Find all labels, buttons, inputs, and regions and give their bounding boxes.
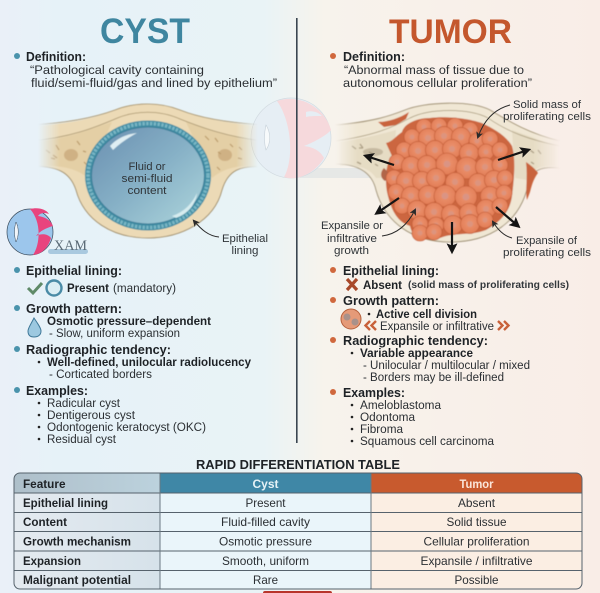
table header: Feature: [23, 477, 66, 491]
cyst: radiographic tendency: - Corticated borders: [49, 367, 152, 381]
cyst: epithelial lining: [14, 263, 176, 296]
cyst definition: “Pathological cavity containing: [30, 63, 204, 77]
icon: check mark: [28, 283, 42, 293]
cyst: epithelial lining: (mandatory): [113, 281, 176, 295]
row: expansion: Smooth, uniform: [222, 554, 309, 568]
cyst: epithelial lining: Epithelial lining:: [26, 263, 122, 278]
differentiation table: [14, 473, 582, 589]
cyst: growth pattern: - Slow, uniform expansion: [49, 326, 180, 340]
icon: ring: [46, 280, 62, 296]
tumor: growth pattern: Growth pattern:: [343, 293, 439, 308]
tumor definition: autonomous cellular proliferation”: [343, 76, 532, 90]
row: growth mechanism: Growth mechanism: [23, 534, 131, 548]
row: content: [23, 515, 507, 529]
tumor: radiographic tendency: Variable appearance: [360, 346, 473, 360]
label: epithelial lining: Epithelial: [222, 233, 268, 245]
icon: cross: [347, 279, 357, 290]
tumor: epithelial lining: Epithelial lining:: [343, 263, 439, 278]
cyst: examples: Examples:: [26, 383, 88, 398]
icon: right chevrons: [498, 321, 508, 330]
cyst definition: Definition:: [26, 49, 86, 64]
row: malignant potential: [23, 573, 499, 587]
icon: left chevrons: [366, 321, 376, 330]
tumor: epithelial lining: (solid mass of proliferating cells): [408, 280, 569, 291]
tumor: growth pattern: Expansile or infiltrative: [380, 319, 494, 333]
tumor: examples: Squamous cell carcinoma: [360, 434, 494, 448]
tumor: radiographic tendency: - Unilocular / multilocular / mixed: [363, 358, 530, 372]
cyst: radiographic tendency: Well-defined, unilocular radiolucency: [47, 355, 251, 369]
illustration: tumor in bone: [321, 99, 591, 259]
arrow: expansile or infiltrative: [382, 210, 415, 236]
cyst: radiographic tendency: [14, 342, 251, 381]
row: epithelial lining: Present: [246, 496, 286, 510]
row: content: Content: [23, 515, 67, 529]
cropped red badge at bottom edge: [263, 591, 332, 593]
label: expansile or infiltrative: growth: [334, 245, 369, 257]
tumor: growth pattern: Active cell division: [376, 307, 477, 321]
label: expansile of cells: [503, 235, 591, 259]
cyst: examples: Radicular cyst: [47, 396, 121, 410]
label: solid mass: Solid mass of: [513, 99, 582, 111]
row: epithelial lining: [23, 496, 496, 510]
table header: Cyst: [252, 477, 278, 491]
title: TUMOR: TUMOR: [389, 13, 512, 51]
icon: dividing cell: [341, 309, 361, 329]
illustration: cyst in bone: [30, 104, 268, 257]
tumor: epithelial lining: Absent: [363, 278, 402, 292]
label: fluid: [122, 161, 172, 197]
label: solid mass: [503, 99, 591, 123]
row: growth mechanism: Cellular proliferation: [424, 534, 530, 548]
icon: water drop: [28, 318, 41, 337]
row: epithelial lining: Absent: [458, 496, 496, 510]
label: expansile or infiltrative: Expansile or: [321, 220, 383, 232]
cyst: growth pattern: Growth pattern:: [26, 301, 122, 316]
central divider: [296, 18, 298, 443]
tumor: radiographic tendency: Radiographic tendency:: [343, 333, 488, 348]
arrow: epithelial lining: [194, 221, 219, 237]
arrow: solid mass: [478, 105, 510, 137]
label: expansile or infiltrative: [321, 220, 383, 257]
row: epithelial lining: Epithelial lining: [23, 496, 108, 510]
watermark: faint centre logo: [251, 98, 372, 178]
row: malignant potential: Possible: [454, 573, 499, 587]
tumor definition: [330, 49, 532, 90]
label: expansile or infiltrative: infiltrative: [327, 233, 377, 245]
tumor: examples: Fibroma: [360, 422, 403, 436]
table header: Tumor: [460, 477, 494, 491]
label: fluid: content: [128, 185, 167, 197]
tumor: radiographic tendency: - Borders may be ill-defined: [363, 370, 504, 384]
tumor: examples: Odontoma: [360, 410, 415, 424]
row: expansion: Expansile / infiltrative: [420, 554, 533, 568]
label: fluid: Fluid or: [128, 161, 166, 173]
cyst: epithelial lining: Present: [67, 281, 109, 295]
cyst: growth pattern: [14, 301, 211, 340]
row: growth mechanism: Osmotic pressure: [219, 534, 312, 548]
cyst: examples: [14, 383, 206, 446]
label: epithelial lining: [222, 233, 268, 257]
arrow: expansile of cells: [493, 222, 512, 238]
growth arrows: [366, 150, 528, 251]
cyst: examples: Dentigerous cyst: [47, 408, 136, 422]
tumor: examples: Examples:: [343, 385, 405, 400]
table header: [23, 477, 494, 491]
cyst definition: [14, 49, 277, 90]
tumor definition: Definition:: [343, 49, 405, 64]
row: content: Fluid-filled cavity: [221, 515, 310, 529]
row: expansion: Expansion: [23, 554, 81, 568]
title: CYST: CYST: [100, 12, 190, 51]
label: epithelial lining: lining: [232, 245, 258, 257]
tumor: growth pattern: [330, 293, 508, 333]
label: expansile of cells: Expansile of: [516, 235, 578, 247]
table heading: RAPID DIFFERENTIATION TABLE: [196, 458, 400, 472]
row: malignant potential: Malignant potential: [23, 573, 131, 587]
watermark logo: EXAM: XAM: [54, 238, 87, 254]
row: content: Solid tissue: [446, 515, 507, 529]
cyst: examples: Odontogenic keratocyst (OKC): [47, 420, 206, 434]
tumor: examples: [330, 385, 494, 448]
label: solid mass: proliferating cells: [503, 111, 591, 123]
tumor definition: “Abnormal mass of tissue due to: [344, 63, 524, 77]
label: expansile of cells: proliferating cells: [503, 247, 591, 259]
row: expansion: [23, 554, 533, 568]
watermark logo: EXAM: [7, 208, 88, 255]
row: malignant potential: Rare: [253, 573, 278, 587]
tumor: radiographic tendency: [330, 333, 530, 384]
row: growth mechanism: [23, 534, 530, 548]
cyst: growth pattern: Osmotic pressure–dependent: [47, 314, 211, 328]
cyst: examples: Residual cyst: [47, 432, 117, 446]
cyst: radiographic tendency: Radiographic tendency:: [26, 342, 171, 357]
label: fluid: semi-fluid: [122, 173, 172, 185]
cyst definition: fluid/semi-fluid/gas and lined by epithelium”: [31, 76, 277, 90]
tumor: epithelial lining: [330, 263, 569, 292]
tumor: examples: Ameloblastoma: [360, 398, 441, 412]
